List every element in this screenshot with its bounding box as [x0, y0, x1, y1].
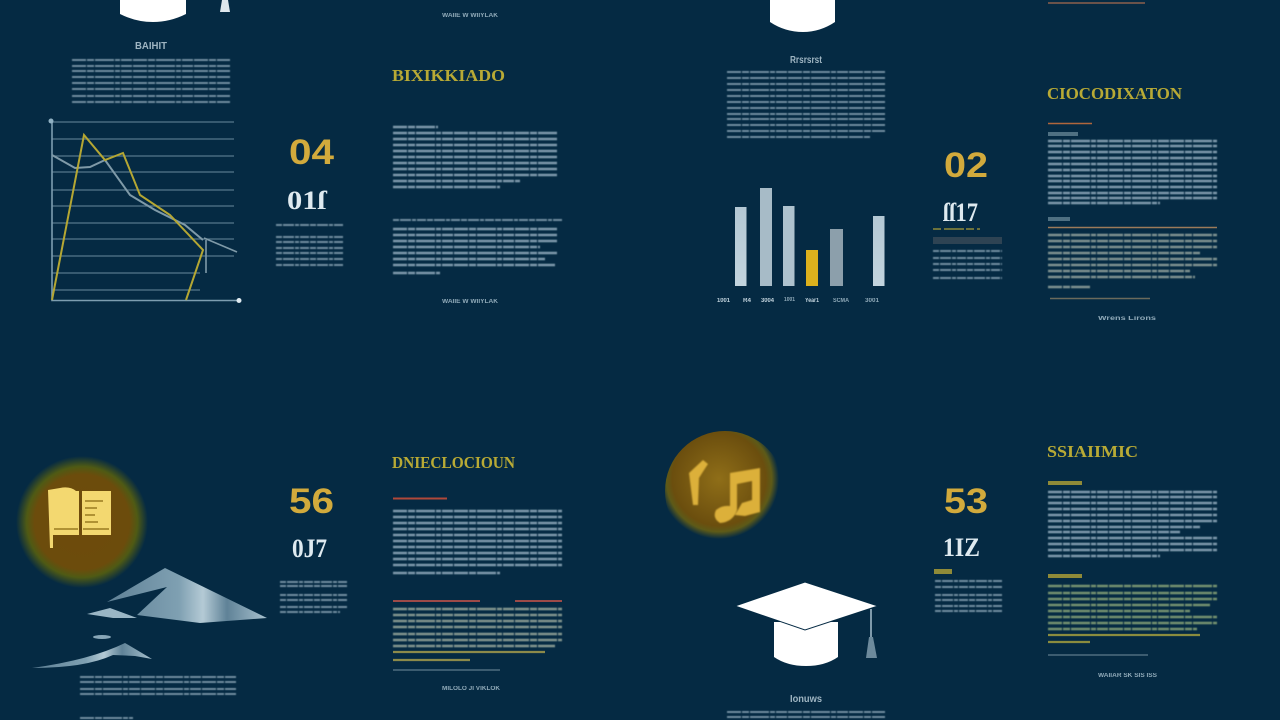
panel: bottom middle text	[392, 453, 562, 692]
bar chart: 3004	[761, 298, 775, 304]
label 01: 01ſ	[287, 186, 328, 215]
icon: music note in glowing circle	[665, 431, 785, 551]
label 17: ſſ17	[943, 198, 978, 227]
highlight bar	[933, 237, 1002, 244]
bar chart: R4	[743, 298, 752, 304]
caption: top: WAIIE W WIIYLAK	[442, 13, 499, 19]
bar chart: SCMA	[833, 298, 850, 304]
bar chart: Year1	[805, 298, 820, 304]
text block	[1048, 586, 1217, 629]
text block	[393, 609, 562, 646]
caption: Wrens Lirons	[1098, 316, 1157, 322]
text block	[280, 582, 348, 612]
text block	[393, 229, 558, 273]
accent rule	[1048, 122, 1092, 124]
label 17: 1IZ	[943, 533, 980, 562]
panel: top middle text	[392, 13, 563, 305]
accent rule	[1048, 226, 1217, 228]
icon: graduation cap fragment	[120, 0, 230, 22]
text block	[727, 712, 885, 717]
rule	[933, 228, 980, 230]
panel: right stats 53	[934, 482, 1003, 611]
text block	[276, 225, 344, 265]
icon: graduation cap	[735, 582, 878, 666]
subheading	[1048, 574, 1082, 578]
text block	[933, 251, 1002, 278]
text block	[1048, 235, 1217, 287]
panel: top right text	[1047, 3, 1217, 322]
rule	[393, 669, 500, 671]
panel: top left	[48, 0, 242, 303]
subheading	[1048, 481, 1082, 485]
panel: bottom centre	[665, 431, 885, 717]
text block: left intro	[72, 60, 230, 102]
bar chart: 1001	[717, 298, 731, 304]
panel: top centre	[717, 0, 885, 304]
panel: bottom left	[16, 456, 267, 718]
panel: bottom right text	[1047, 442, 1217, 679]
number 56: 56	[289, 482, 334, 521]
text block	[393, 219, 563, 221]
number 04: 04	[289, 133, 335, 172]
text block	[727, 72, 885, 137]
bar chart: 3001	[865, 298, 880, 304]
text block	[1048, 141, 1217, 203]
heading: gold title: SSIAIIMIC	[1047, 442, 1138, 461]
accent rule	[1050, 298, 1150, 300]
text block	[1048, 492, 1217, 556]
heading: gold title: BIXIKKIADO	[392, 66, 505, 85]
text block	[935, 581, 1003, 611]
heading: gold title: CIOCODIXATON	[1047, 84, 1183, 103]
rule	[1048, 654, 1148, 656]
heading: left chart: BAIHIT	[135, 41, 167, 52]
subheading	[1048, 217, 1070, 221]
label 017: 0J7	[292, 534, 327, 563]
highlighted lines	[393, 652, 545, 660]
text block	[80, 677, 236, 718]
bar chart: 1001	[784, 297, 796, 303]
illustration: metallic mountains	[32, 568, 267, 668]
number 53: 53	[944, 482, 988, 521]
text block	[393, 127, 558, 187]
line chart	[48, 118, 242, 303]
text block	[393, 511, 562, 573]
subheading	[1048, 132, 1078, 136]
accent rule	[393, 600, 562, 602]
bar chart	[717, 188, 884, 304]
accent rule	[393, 498, 447, 500]
heading: centre: Rrsrsrst	[790, 55, 823, 66]
icon: graduation cap fragment	[770, 0, 835, 32]
panel: left stats 56	[280, 482, 348, 612]
highlight mark	[934, 569, 952, 574]
caption: WAIIAR SK SIS ISS	[1098, 673, 1157, 679]
heading: gold title: DNIECLOCIOUN	[392, 453, 516, 472]
panel: left stats 04	[276, 133, 344, 265]
heading: centre: Ionuws	[790, 694, 822, 705]
caption: MILOLO JI VIKLOK	[442, 686, 501, 692]
divider caption: WAIIE W WIIYLAK	[442, 299, 499, 305]
number 02: 02	[944, 146, 988, 185]
panel: right stats 02	[933, 146, 1002, 278]
top rule	[1048, 2, 1145, 4]
highlighted lines	[1048, 635, 1200, 642]
icon: book in glowing circle	[16, 456, 148, 588]
